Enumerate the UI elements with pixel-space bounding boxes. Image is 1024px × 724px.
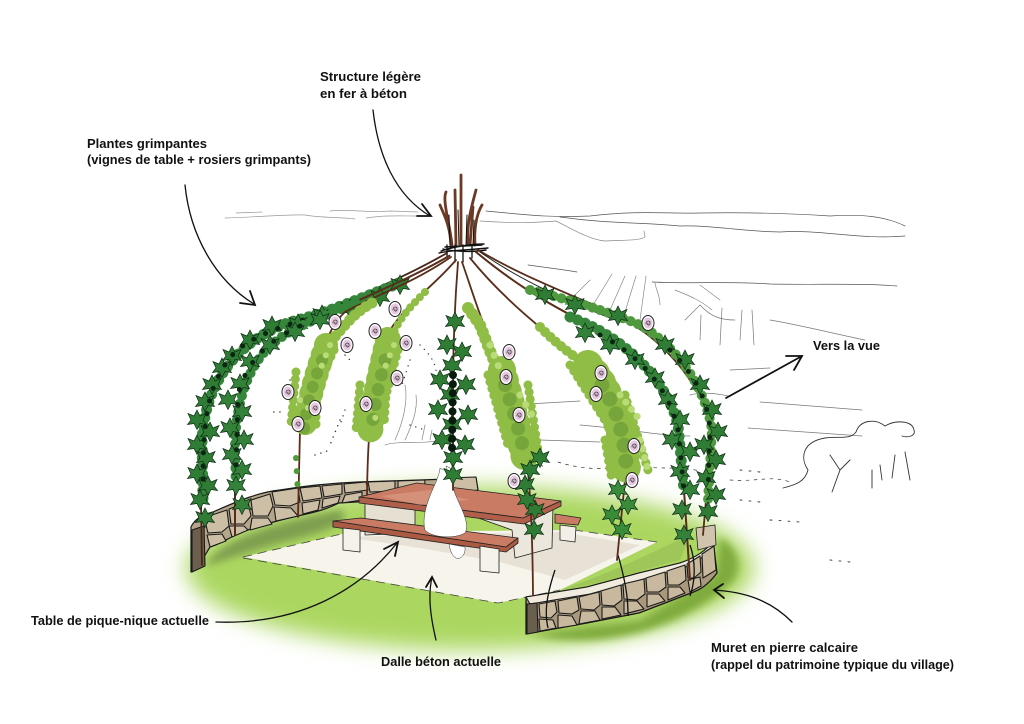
annotation arrow: structure	[373, 110, 431, 216]
far bench	[555, 514, 581, 525]
annotation arrow: dalle	[426, 577, 437, 640]
ground: green lawn	[186, 486, 754, 650]
left fourth arch with lime foliage and roses	[340, 260, 456, 495]
label: structure line 2: en fer à béton	[320, 86, 407, 101]
picnic table	[333, 483, 581, 573]
lawn shadow right	[530, 538, 738, 640]
label: table: Table de pique-nique actuelle	[31, 613, 209, 628]
right first arch with lime foliage and roses	[462, 262, 550, 595]
right outer arch vine	[478, 250, 728, 535]
left third arch with lime foliage and roses	[270, 257, 451, 517]
label: muret line 2: (rappel du patrimoine typique du village)	[711, 657, 954, 672]
annotation arrow: plantes	[185, 185, 255, 305]
right third arch vine	[476, 252, 700, 580]
annotation arrow: muret	[714, 584, 792, 622]
lawn shadow left	[206, 510, 344, 566]
metal crown structure	[439, 175, 488, 262]
wall end post	[696, 525, 716, 550]
concrete slab	[243, 530, 657, 603]
annotation arrow: vue	[726, 356, 802, 398]
near bench	[333, 518, 518, 547]
left second arch vine	[218, 256, 449, 535]
label: vue: Vers la vue	[813, 338, 880, 353]
white figure silhouette	[424, 466, 467, 558]
label: plantes: Plantes grimpantes	[87, 136, 207, 151]
table legs	[365, 500, 415, 535]
annotation arrow: table	[216, 542, 398, 622]
label: structure: Structure légère	[320, 69, 421, 84]
left outer arch vine	[188, 253, 450, 565]
background: bush sketch	[740, 421, 914, 562]
label: dalle: Dalle béton actuelle	[381, 654, 501, 669]
right stone wall	[526, 540, 717, 634]
label: plantes line 2: (vignes de table + rosiers grimpants)	[87, 152, 311, 167]
label: muret: Muret en pierre calcaire	[711, 640, 858, 655]
left stone wall	[191, 477, 478, 572]
centre vine	[428, 262, 478, 490]
background: landscape sketch lines	[225, 210, 905, 482]
table top	[359, 483, 561, 518]
stems over wall	[546, 545, 694, 628]
bench legs	[343, 528, 499, 573]
right second arch with lime foliage and roses	[470, 258, 648, 560]
